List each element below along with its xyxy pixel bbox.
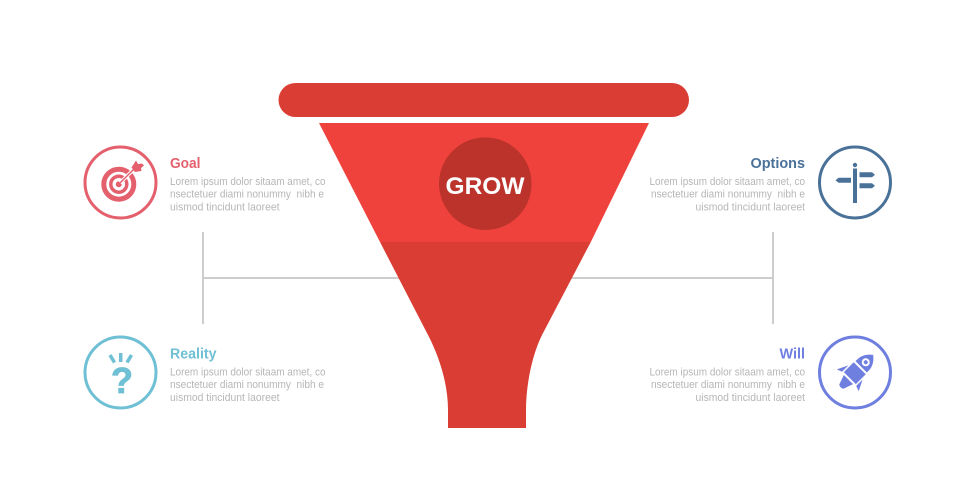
- left connector: [203, 232, 400, 324]
- funnel lower section: [380, 242, 591, 428]
- funnel: [278, 83, 689, 428]
- text block: goal: uismod tincidunt laoreet: [170, 202, 280, 214]
- text block: options: Lorem ipsum dolor sitaam amet, co: [650, 176, 805, 188]
- heading: goal: Goal: [170, 156, 200, 172]
- text block: reality: [170, 366, 326, 404]
- panel: reality: [85, 337, 326, 408]
- heading: options: Options: [750, 156, 805, 172]
- text block: options: nsectetuer diami nonummy nibh e: [651, 189, 805, 201]
- text block: will: [650, 366, 805, 404]
- heading: reality: Reality: [170, 346, 216, 362]
- icon: question mark: [85, 337, 156, 408]
- text block: goal: [170, 176, 326, 214]
- icon: rocket: [820, 337, 890, 408]
- panel: options: [650, 147, 890, 218]
- text block: will: uismod tincidunt laoreet: [696, 392, 805, 404]
- text block: reality: Lorem ipsum dolor sitaam amet, co: [170, 366, 326, 378]
- text block: will: Lorem ipsum dolor sitaam amet, co: [650, 366, 805, 378]
- text block: goal: Lorem ipsum dolor sitaam amet, co: [170, 176, 326, 188]
- icon: question mark: ?: [111, 360, 133, 401]
- text block: goal: nsectetuer diami nonummy nibh e: [170, 189, 324, 201]
- icon: target: [85, 147, 156, 218]
- funnel rim: [278, 83, 689, 117]
- text block: options: uismod tincidunt laoreet: [696, 202, 805, 214]
- grow badge: [439, 137, 532, 230]
- grow badge: GROW: [446, 173, 525, 200]
- panel: goal: [85, 147, 326, 218]
- text block: will: nsectetuer diami nonummy nibh e: [651, 379, 805, 391]
- text block: options: [650, 176, 805, 214]
- heading: will: Will: [780, 346, 805, 362]
- right connector: [570, 232, 773, 324]
- panel: will: [650, 337, 890, 408]
- icon: signpost: [820, 147, 890, 218]
- text block: reality: uismod tincidunt laoreet: [170, 392, 280, 404]
- funnel upper section: [319, 123, 649, 242]
- text block: reality: nsectetuer diami nonummy nibh e: [170, 379, 324, 391]
